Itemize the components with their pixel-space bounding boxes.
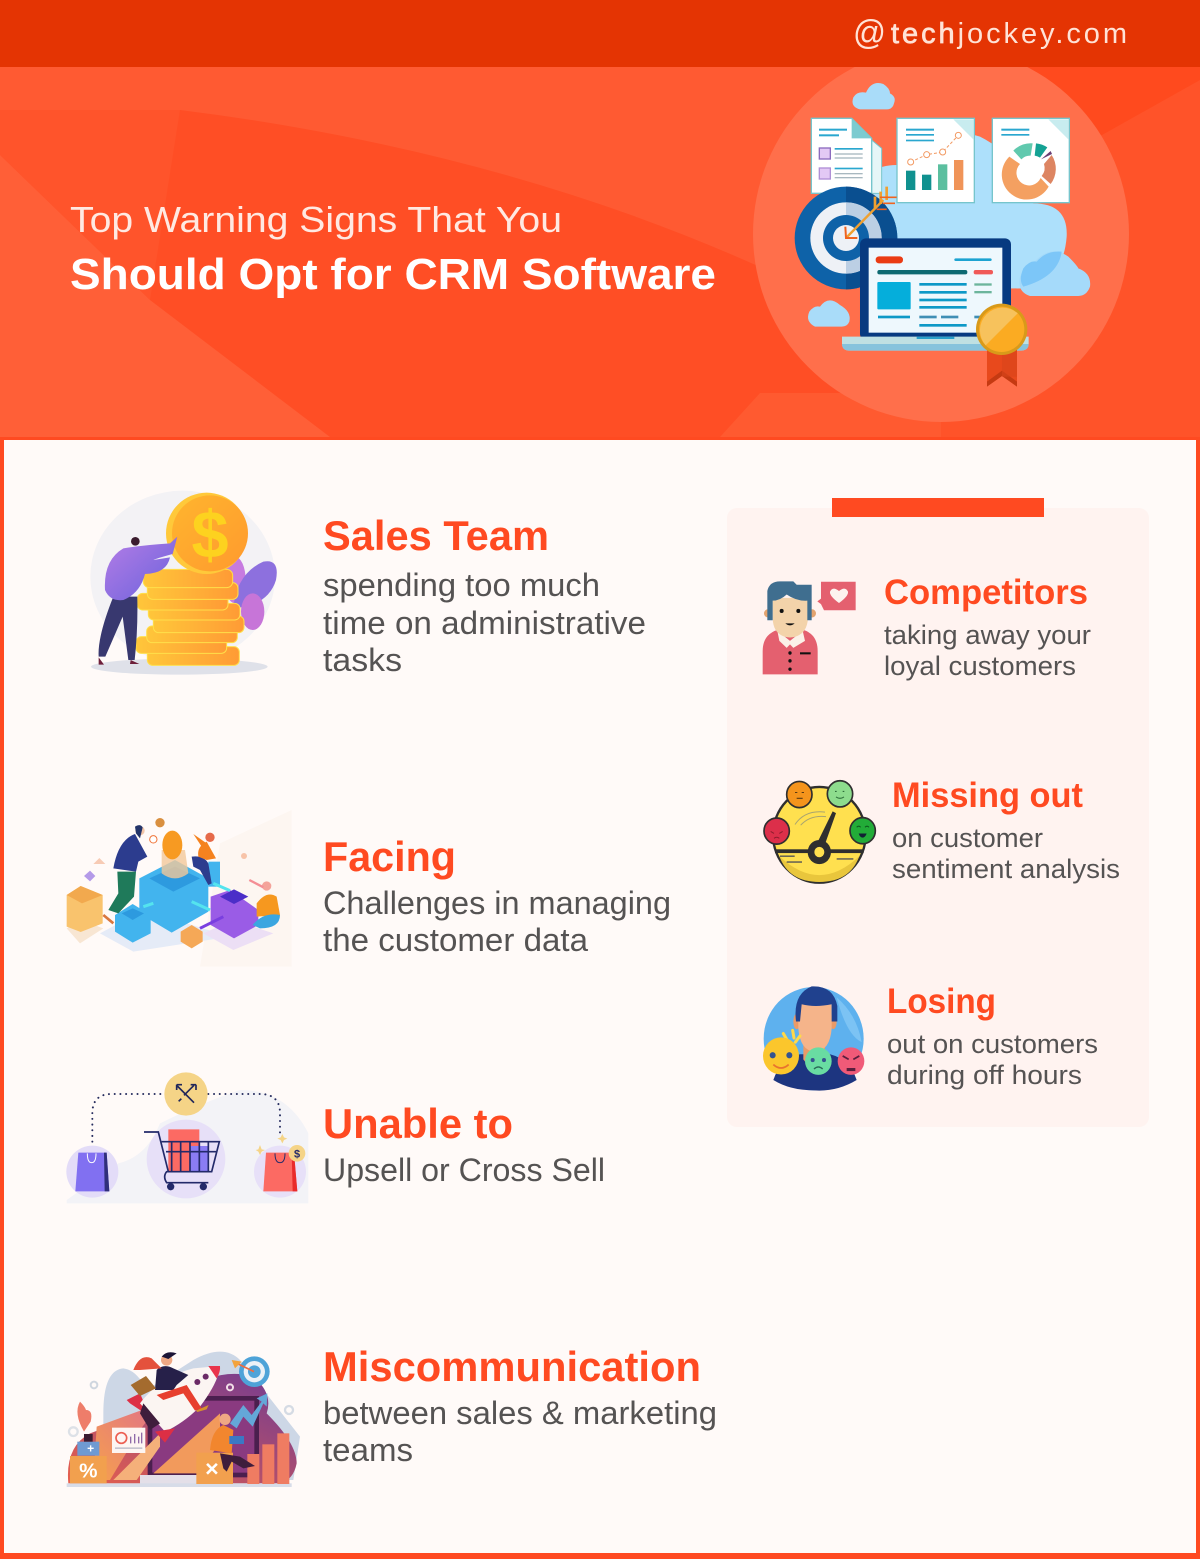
item 2 text [323, 833, 671, 958]
chart document [897, 118, 974, 203]
item 1 text: Sales Team [323, 512, 549, 559]
rider [155, 1366, 188, 1390]
big coin [166, 493, 247, 574]
content panel [4, 440, 1196, 1553]
losing text [887, 982, 1098, 1090]
item 2 icon: isometric data blocks [67, 810, 292, 967]
coins [136, 569, 244, 665]
item 3 text: Unable to [323, 1100, 513, 1147]
competitors text [884, 573, 1091, 681]
item 2 text: Facing [323, 833, 456, 880]
competitors text: Competitors [884, 573, 1088, 612]
icon: sentiment gauge [764, 781, 875, 883]
worker [257, 894, 280, 917]
coin light [162, 850, 188, 878]
brand: techjockey.com: techjockey.com [891, 18, 1127, 50]
item 4 icon: rocket team: × [205, 1456, 219, 1482]
title: Top Warning Signs That You [70, 199, 562, 240]
item 4 text: between sales & marketing [323, 1395, 717, 1431]
item 1 text: tasks [323, 642, 402, 678]
item 1 icon: coin stack [90, 491, 277, 675]
item 3 icon: shopping cart: $ [294, 1148, 300, 1160]
header banner [0, 67, 1200, 437]
big cloud [873, 134, 1067, 290]
target [795, 187, 897, 289]
item 3 text: Upsell or Cross Sell [323, 1152, 605, 1188]
title: Should Opt for CRM Software [70, 250, 716, 299]
losing text: Losing [887, 982, 996, 1021]
item 2 text: Challenges in managing [323, 885, 671, 921]
competitors text: taking away your [884, 620, 1091, 650]
small cube [115, 904, 151, 943]
item 1 text [323, 512, 646, 678]
missing out text [892, 776, 1120, 884]
item 4 text: Miscommunication [323, 1343, 701, 1390]
plant [77, 1402, 91, 1432]
small cloud left [808, 300, 850, 327]
title [70, 199, 716, 299]
icon: customer with heart bubble [763, 581, 856, 674]
badge [976, 304, 1027, 387]
gears [91, 1382, 97, 1388]
item 2 text: the customer data [323, 922, 588, 958]
item 4 icon: rocket team: + [87, 1442, 94, 1456]
shapes [84, 871, 95, 881]
bars [247, 1454, 259, 1484]
cloud right [1019, 251, 1090, 296]
donut document [992, 118, 1069, 203]
trend arrow [230, 1393, 267, 1428]
item 1 text: spending too much [323, 567, 600, 603]
dashboard card [112, 1428, 145, 1453]
item 4 icon: rocket team: % [79, 1459, 98, 1482]
item 1 text: time on administrative [323, 605, 646, 641]
missing out text: on customer [892, 823, 1043, 853]
leaves [224, 557, 246, 603]
item 3 icon: shopping cart [66, 1072, 308, 1203]
connectors [143, 883, 230, 910]
brand: techjockey.com: @ [853, 14, 886, 52]
item 4 text: teams [323, 1432, 413, 1468]
big cube [139, 860, 208, 933]
item 4 icon: rocket team [67, 1352, 300, 1487]
rocket [127, 1393, 150, 1417]
purple block [211, 890, 258, 938]
boxes [77, 1442, 99, 1456]
icon: customer moods [763, 986, 864, 1091]
gold box [67, 886, 103, 932]
person [99, 597, 137, 660]
missing out text: sentiment analysis [892, 854, 1120, 884]
side panel [727, 498, 1149, 1127]
item 3 text [323, 1100, 605, 1188]
item 4 text [323, 1343, 717, 1468]
losing text: out on customers [887, 1029, 1098, 1059]
missing out text: Missing out [892, 776, 1083, 815]
top bar [0, 0, 1200, 67]
target [239, 1356, 270, 1387]
header illustration: CRM dashboard [753, 46, 1129, 422]
seated woman [210, 1425, 233, 1453]
competitors text: loyal customers [884, 651, 1076, 681]
orange cube [181, 925, 203, 948]
item 1 icon: coin stack: $ [191, 498, 229, 572]
losing text: during off hours [887, 1060, 1082, 1090]
document stack [872, 140, 882, 193]
man [108, 872, 136, 913]
arrow [845, 187, 897, 238]
small cloud top [852, 83, 895, 109]
woman [192, 856, 212, 885]
laptop [860, 238, 1011, 340]
